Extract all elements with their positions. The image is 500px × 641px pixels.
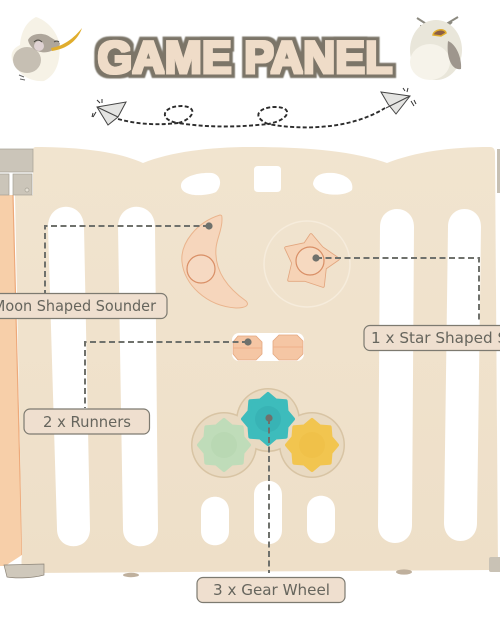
icon: moon sounder (182, 215, 248, 308)
panel: left folded side strip (0, 195, 22, 566)
icon: paper planes with dashed flight path (92, 88, 416, 127)
icon: left bird (12, 17, 82, 81)
label: star shaped sounder (364, 326, 500, 350)
panel: play fence (15, 147, 498, 573)
icon: gear wheels (191, 388, 345, 478)
icon: star sounder (264, 221, 350, 307)
callout: gear leader line (265, 414, 273, 573)
foot: bottom right (489, 557, 500, 572)
foot: bottom left (4, 564, 44, 578)
title: GAME PANEL (98, 32, 392, 83)
label: runners (24, 409, 150, 434)
icon: runners (232, 333, 304, 361)
callout: runners leader line (85, 338, 252, 408)
gear: teal (243, 394, 293, 444)
callout: moon leader line (45, 222, 213, 293)
foot: small supports (123, 569, 412, 577)
label: gear wheel (197, 578, 345, 602)
hinge: top left clamps (0, 149, 33, 195)
label: gear wheel: 3 x Gear Wheel (213, 581, 330, 599)
gear: green (199, 420, 249, 470)
label: runners: 2 x Runners (43, 413, 131, 431)
hinge: top right clamp (497, 149, 500, 193)
gear: yellow (287, 420, 337, 470)
icon: right owl (410, 17, 462, 80)
callout: star leader line (312, 254, 479, 323)
